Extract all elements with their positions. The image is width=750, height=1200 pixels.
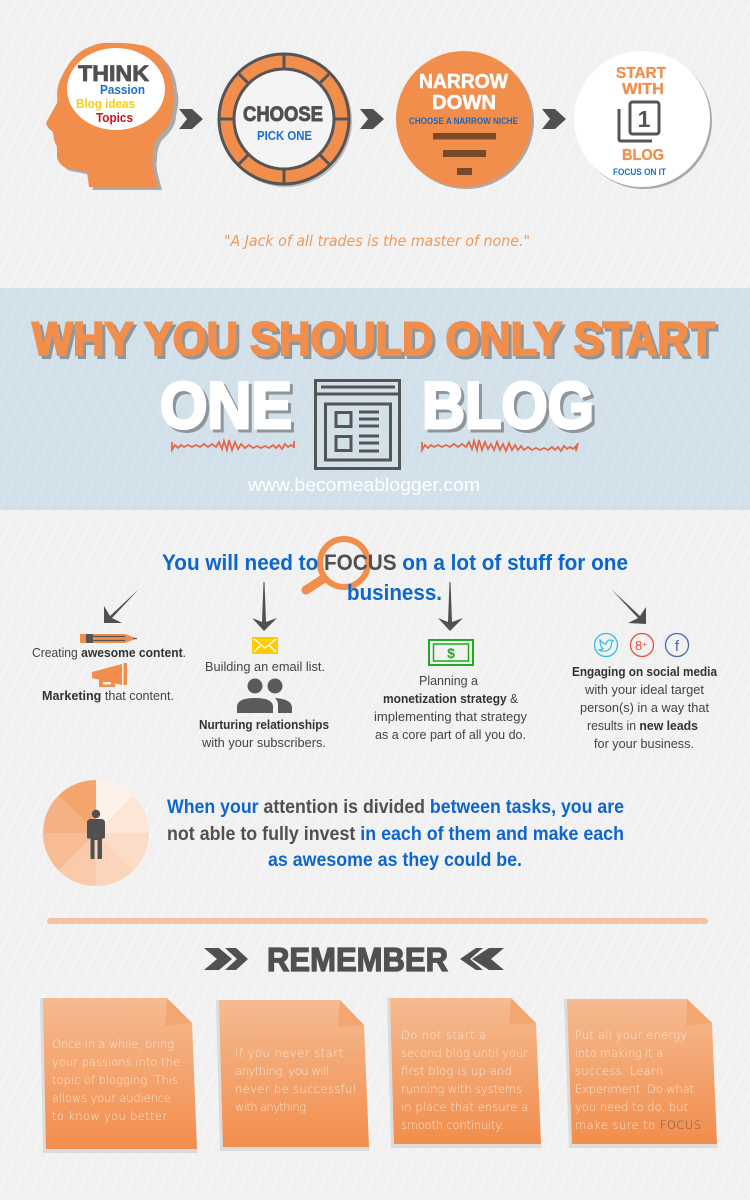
heading: focus: You will need to FOCUS on a lot of stuff for one	[162, 550, 628, 575]
icon: browser window	[315, 380, 400, 468]
title: blog: BLOG	[422, 368, 594, 442]
arrow: narrow to start	[542, 109, 566, 129]
text: engaging on social media: person(s) in a way that	[580, 700, 709, 715]
title: one: ONE	[160, 368, 292, 442]
title: blog: BLOG	[425, 371, 597, 445]
panel: title band	[0, 288, 750, 510]
note 3: running with systems	[401, 1082, 522, 1096]
icon: facebook: f	[675, 638, 680, 655]
note 4: Put all your energy	[575, 1028, 687, 1042]
text: creating awesome content: Creating awesome content.	[32, 645, 186, 660]
note 4: make sure to FOCUS	[575, 1118, 701, 1132]
heading: focus: business.	[347, 580, 442, 605]
step 2: choose ring: PICK ONE	[257, 128, 312, 143]
step 1: think head: Passion	[100, 82, 145, 97]
note 2	[216, 1000, 370, 1151]
text: divided attention: When your attention is divided between tasks, you are	[167, 797, 624, 818]
note 3: smooth continuity.	[401, 1118, 504, 1132]
step 3: narrow down circle: NARROW	[419, 71, 508, 93]
note 4: Experiment. Do what	[575, 1082, 694, 1096]
underline scribble left	[172, 440, 294, 450]
arrow: to monetization	[438, 582, 463, 631]
text: monetization strategy	[374, 673, 527, 742]
note 2: If you never start	[235, 1046, 343, 1060]
icon: twitter	[594, 634, 618, 656]
step 1: think head	[46, 43, 178, 190]
text: monetization strategy: as a core part of all you do.	[375, 727, 526, 742]
arrow: choose to narrow	[360, 109, 384, 129]
text: building an email list: Building an email list.	[205, 659, 325, 674]
note 1: Once in a while, bring	[52, 1037, 174, 1051]
icon: layered number one: 1	[638, 106, 651, 132]
column: monetization	[374, 640, 527, 742]
note 2: with anything.	[235, 1100, 309, 1114]
note 1: allows your audience	[52, 1091, 171, 1105]
column: email: with your subscribers.	[201, 735, 326, 750]
note 3: first blog is up and	[401, 1064, 512, 1078]
website url: www.becomeablogger.com	[247, 475, 480, 495]
text: engaging on social media: for your business.	[594, 736, 694, 751]
note 3: in place that ensure a	[401, 1100, 528, 1114]
text: engaging on social media: results in new leads	[587, 718, 698, 733]
text: engaging on social media	[572, 664, 718, 751]
text: monetization strategy: implementing that strategy	[374, 709, 527, 724]
note 1: to know you better.	[52, 1109, 170, 1123]
column: content	[32, 634, 186, 703]
text: divided attention	[167, 797, 624, 871]
note 3: second blog until your	[401, 1046, 528, 1060]
icon: google plus: +	[642, 640, 647, 649]
text: divided attention: not able to fully invest in each of them and make each	[167, 824, 624, 845]
icon: person	[87, 810, 105, 859]
step 4: start with one blog circle	[574, 51, 712, 189]
quote: "A Jack of all trades is the master of none."	[224, 232, 530, 250]
step 3: narrow down circle: CHOOSE A NARROW NICHE	[409, 116, 518, 127]
step 3: narrow down circle	[396, 51, 534, 189]
title: one: ONE	[163, 371, 295, 445]
text: monetization strategy: Planning a	[419, 673, 479, 688]
step 4: start with one blog circle: WITH	[622, 81, 664, 98]
note 4	[564, 999, 718, 1148]
icon: envelope	[252, 637, 278, 654]
text: engaging on social media: Engaging on social media	[572, 664, 718, 679]
step 1: think head: Blog ideas	[76, 96, 135, 111]
arrow: think to choose	[179, 109, 203, 129]
icon: left chevrons	[460, 948, 504, 970]
icon: megaphone	[92, 663, 127, 687]
note 3	[387, 998, 542, 1148]
step 2: choose ring	[219, 54, 352, 187]
note 2: anything, you will	[235, 1064, 329, 1078]
step 3: narrow down circle: DOWN	[432, 92, 496, 114]
icon: right chevrons	[204, 948, 248, 970]
step 1: think head: Topics	[96, 110, 133, 125]
text: divided attention: as awesome as they could be.	[268, 850, 522, 871]
arrow: to email	[252, 582, 277, 631]
step 4: start with one blog circle: FOCUS ON IT	[613, 167, 666, 178]
title: why you should only start: WHY YOU SHOULD ONLY START	[32, 312, 715, 365]
arrow: to social	[611, 589, 646, 624]
note 1: your passions into the	[52, 1055, 180, 1069]
heading: focus	[162, 550, 628, 605]
heading: remember	[204, 941, 504, 978]
text: nurturing relationships: Nurturing relationships	[199, 717, 329, 732]
underline scribble right	[422, 440, 578, 451]
icon: facebook	[666, 634, 688, 656]
note 3: Do not start a	[401, 1028, 486, 1042]
heading: remember: REMEMBER	[267, 941, 448, 978]
text: monetization strategy: monetization strategy &	[383, 691, 518, 706]
step 4: start with one blog circle: START	[616, 65, 666, 82]
icon: dollar bill	[429, 640, 473, 665]
note 1: topic of blogging. This	[52, 1073, 178, 1087]
icon: google plus: 8	[635, 638, 642, 653]
icon: pencil	[80, 634, 137, 643]
chart: attention pie with person	[43, 780, 149, 886]
icon: people	[237, 678, 292, 713]
step 2: choose ring: CHOOSE	[243, 103, 323, 126]
icon: dollar bill: $	[447, 645, 455, 661]
arrow: to content	[104, 589, 139, 623]
note 2: never be successful	[235, 1082, 356, 1096]
text: engaging on social media: with your ideal target	[584, 682, 704, 697]
text: marketing that content: Marketing that content.	[42, 688, 174, 703]
step 4: start with one blog circle: BLOG	[622, 147, 664, 164]
note 4: into making it a	[575, 1046, 663, 1060]
note 4: success. Learn.	[575, 1064, 667, 1078]
icon: magnifying glass	[306, 539, 368, 590]
column: social media	[572, 634, 718, 751]
icon: google plus	[630, 634, 654, 656]
note 1	[40, 998, 198, 1153]
note 4: you need to do, but	[575, 1100, 688, 1114]
step 1: think head: THINK	[78, 61, 150, 86]
column: email	[199, 637, 329, 750]
